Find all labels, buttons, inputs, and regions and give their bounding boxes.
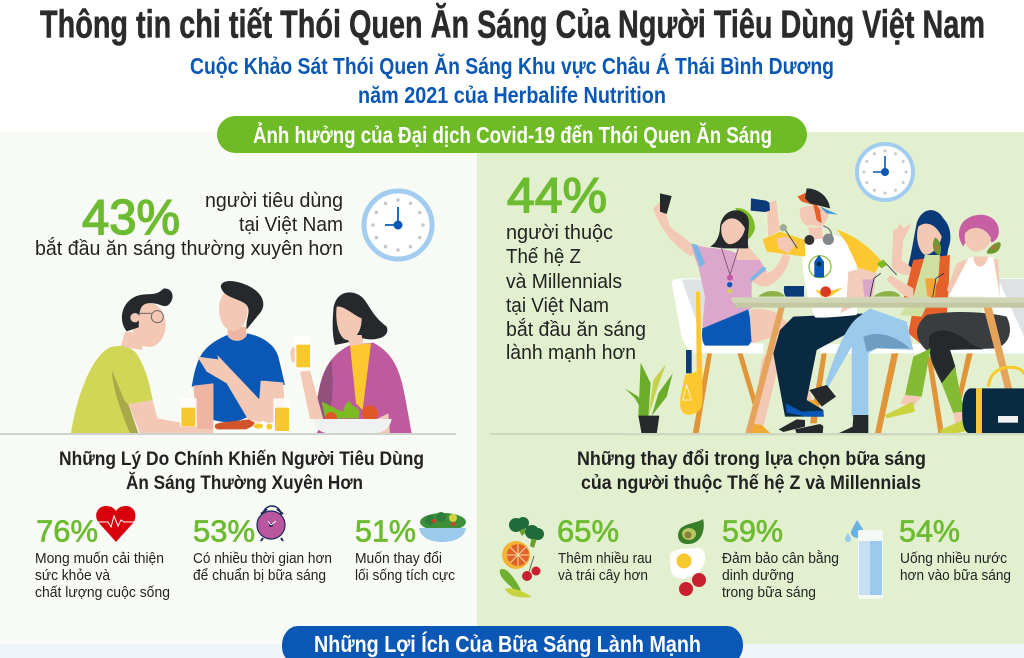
stat: 44 percent: người thuộc bbox=[506, 222, 613, 244]
plate with sausages and egg bbox=[215, 419, 277, 433]
heading: breakfast changes: Những thay đổi trong lựa chọn bữa sáng bbox=[577, 449, 926, 470]
stat: 44 percent: và Millennials bbox=[506, 271, 622, 293]
stat: 44 percent bbox=[506, 169, 646, 364]
stat: 76 percent: sức khỏe và bbox=[35, 567, 111, 584]
stat: 59 percent: Đảm bảo cân bằng bbox=[722, 550, 839, 567]
panel: bottom section background bbox=[0, 644, 1024, 658]
heading: breakfast changes: của người thuộc Thế hệ Z và Millennials bbox=[581, 473, 921, 494]
subtitle: Cuộc Khảo Sát Thói Quen Ăn Sáng Khu vực Châu Á Thái Bình Dương bbox=[190, 52, 834, 79]
stat: 44 percent: 44% bbox=[507, 169, 607, 223]
juice glasses bbox=[180, 398, 290, 432]
stat: 53 percent: để chuẩn bị bữa sáng bbox=[193, 567, 326, 584]
stat: 76 percent: 76% bbox=[36, 514, 98, 548]
stat: 53 percent: 53% bbox=[193, 514, 255, 548]
stat: 53 percent bbox=[193, 514, 332, 584]
table top with food and legs bbox=[731, 273, 1024, 433]
stat: 54 percent bbox=[899, 514, 1011, 584]
illustration: three people at breakfast bbox=[0, 281, 456, 435]
stat: 51 percent: lối sống tích cực bbox=[355, 567, 455, 584]
woman with blue curly hair bbox=[809, 210, 950, 433]
heading: main reasons: Ăn Sáng Thường Xuyên Hơn bbox=[126, 472, 363, 494]
stat: 59 percent: dinh dưỡng bbox=[722, 567, 794, 584]
icon: purple alarm clock bbox=[257, 506, 285, 541]
stat: 59 percent: trong bữa sáng bbox=[722, 584, 816, 601]
stat: 43 percent: tại Việt Nam bbox=[239, 214, 343, 236]
stat: 76 percent bbox=[35, 514, 170, 601]
stat: 43 percent: 43% bbox=[82, 191, 180, 245]
subtitle: năm 2021 của Herbalife Nutrition bbox=[358, 82, 666, 108]
potted plant bbox=[625, 363, 673, 434]
stat: 44 percent: lành mạnh hơn bbox=[506, 342, 636, 364]
stat: 54 percent: Uống nhiều nước bbox=[900, 550, 1007, 567]
stat: 76 percent: Mong muốn cải thiện bbox=[35, 550, 164, 567]
stat: 65 percent: và trái cây hơn bbox=[558, 567, 648, 584]
heading: main reasons bbox=[59, 449, 424, 494]
man with glasses bbox=[71, 289, 213, 433]
stat: 51 percent: 51% bbox=[355, 514, 416, 548]
stat: 43 percent bbox=[35, 190, 343, 260]
icon: right wall clock bbox=[857, 144, 913, 200]
heading: main reasons: Những Lý Do Chính Khiến Người Tiêu Dùng bbox=[59, 449, 424, 470]
stat: 76 percent: chất lượng cuộc sống bbox=[35, 584, 170, 601]
icon: avocado, egg and tomatoes bbox=[670, 519, 706, 596]
panel: left background bbox=[0, 132, 477, 644]
stat: 54 percent: 54% bbox=[899, 514, 960, 548]
stat: 44 percent: bắt đầu ăn sáng bbox=[506, 318, 646, 341]
woman taking selfie bbox=[653, 193, 823, 433]
icon: left wall clock bbox=[364, 191, 432, 259]
stat: 44 percent: tại Việt Nam bbox=[506, 295, 609, 317]
chairs bbox=[672, 278, 1024, 433]
stat: 44 percent: Thế hệ Z bbox=[506, 246, 581, 268]
subtitle bbox=[190, 52, 834, 108]
rule: left section bbox=[0, 433, 456, 435]
stat: 65 percent: Thêm nhiều rau bbox=[558, 550, 652, 567]
rule: right section bbox=[490, 433, 1024, 435]
stat: 54 percent: hơn vào bữa sáng bbox=[900, 567, 1011, 584]
stat: 65 percent bbox=[557, 514, 652, 584]
icon: vegetables and fruit bbox=[500, 517, 544, 597]
panel: right background bbox=[477, 132, 1024, 644]
illustration: four friends at table bbox=[620, 188, 1024, 435]
green banner bbox=[217, 116, 807, 153]
stat: 59 percent: 59% bbox=[722, 514, 783, 548]
icon: heart with pulse bbox=[96, 506, 135, 542]
green banner: Ảnh hưởng của Đại dịch Covid-19 đến Thói Quen Ăn Sáng bbox=[253, 120, 772, 148]
icon: salad bowl bbox=[419, 512, 466, 542]
stat: 43 percent: bắt đầu ăn sáng thường xuyên hơn bbox=[35, 237, 343, 260]
stat: 51 percent bbox=[355, 514, 455, 584]
woman with pink hair bbox=[885, 215, 1010, 434]
stat: 43 percent: người tiêu dùng bbox=[205, 190, 343, 212]
boy with cap and headphones bbox=[751, 188, 882, 433]
stat: 53 percent: Có nhiều thời gian hơn bbox=[193, 550, 332, 567]
stat: 51 percent: Muốn thay đổi bbox=[355, 550, 442, 567]
yellow bag bbox=[680, 292, 702, 415]
woman in magenta cardigan bbox=[291, 292, 412, 433]
navy duffel bag bbox=[962, 367, 1024, 434]
man in blue shirt bbox=[192, 281, 285, 429]
heading: breakfast changes bbox=[577, 449, 926, 494]
blue banner: Những Lợi Ích Của Bữa Sáng Lành Mạnh bbox=[314, 630, 701, 657]
stat: 59 percent bbox=[722, 514, 839, 601]
icon: glass of water bbox=[845, 520, 883, 599]
stat: 65 percent: 65% bbox=[557, 514, 619, 548]
